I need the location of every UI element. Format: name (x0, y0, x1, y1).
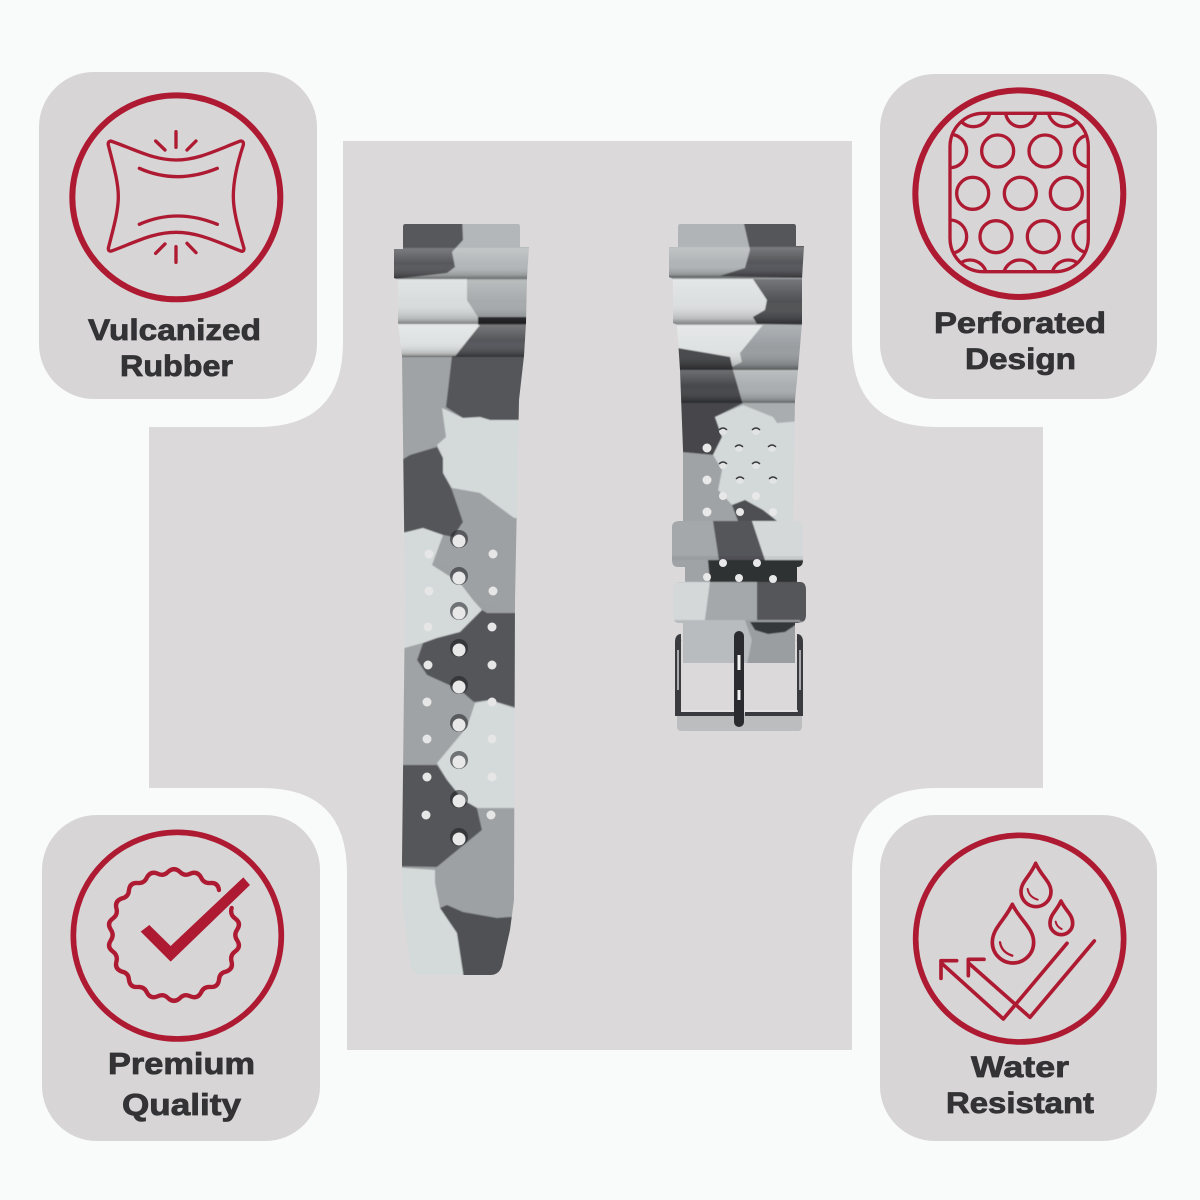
left watch strap (394, 224, 529, 975)
perforations with shadow crescents (719, 427, 777, 484)
label (934, 307, 1106, 376)
icon: stretched rubber (72, 95, 280, 299)
strap band between keepers (660, 560, 710, 582)
strap end (674, 620, 752, 663)
strap perforations (702, 444, 777, 583)
label (88, 314, 261, 383)
right watch strap with buckle (669, 224, 806, 731)
label (946, 1051, 1094, 1120)
buckle (677, 636, 802, 731)
strap side holes (422, 550, 498, 820)
icon: water drops and arrows (916, 835, 1124, 1042)
card: vulcanized rubber (39, 72, 317, 399)
strap camo top (403, 224, 529, 278)
label: Design (965, 343, 1076, 376)
label: Vulcanized (88, 314, 261, 347)
icon: quality badge check (73, 832, 281, 1039)
strap camo body (390, 357, 452, 467)
label: Perforated (934, 307, 1106, 340)
label: Quality (122, 1087, 242, 1122)
label: Rubber (120, 350, 233, 383)
label: Resistant (946, 1087, 1094, 1120)
card: water resistant (880, 815, 1157, 1141)
center panel background (149, 141, 1043, 1050)
card: premium quality (42, 815, 320, 1141)
keeper one (660, 521, 720, 567)
label: Water (971, 1051, 1069, 1084)
label (108, 1046, 255, 1122)
keeper two (673, 582, 710, 620)
strap lobes shading (394, 248, 529, 280)
strap lobes shading (669, 246, 804, 278)
card: perforated design (880, 74, 1157, 399)
icon: perforated pattern (915, 90, 1123, 297)
strap center holes (450, 530, 468, 846)
label: Premium (108, 1046, 255, 1081)
